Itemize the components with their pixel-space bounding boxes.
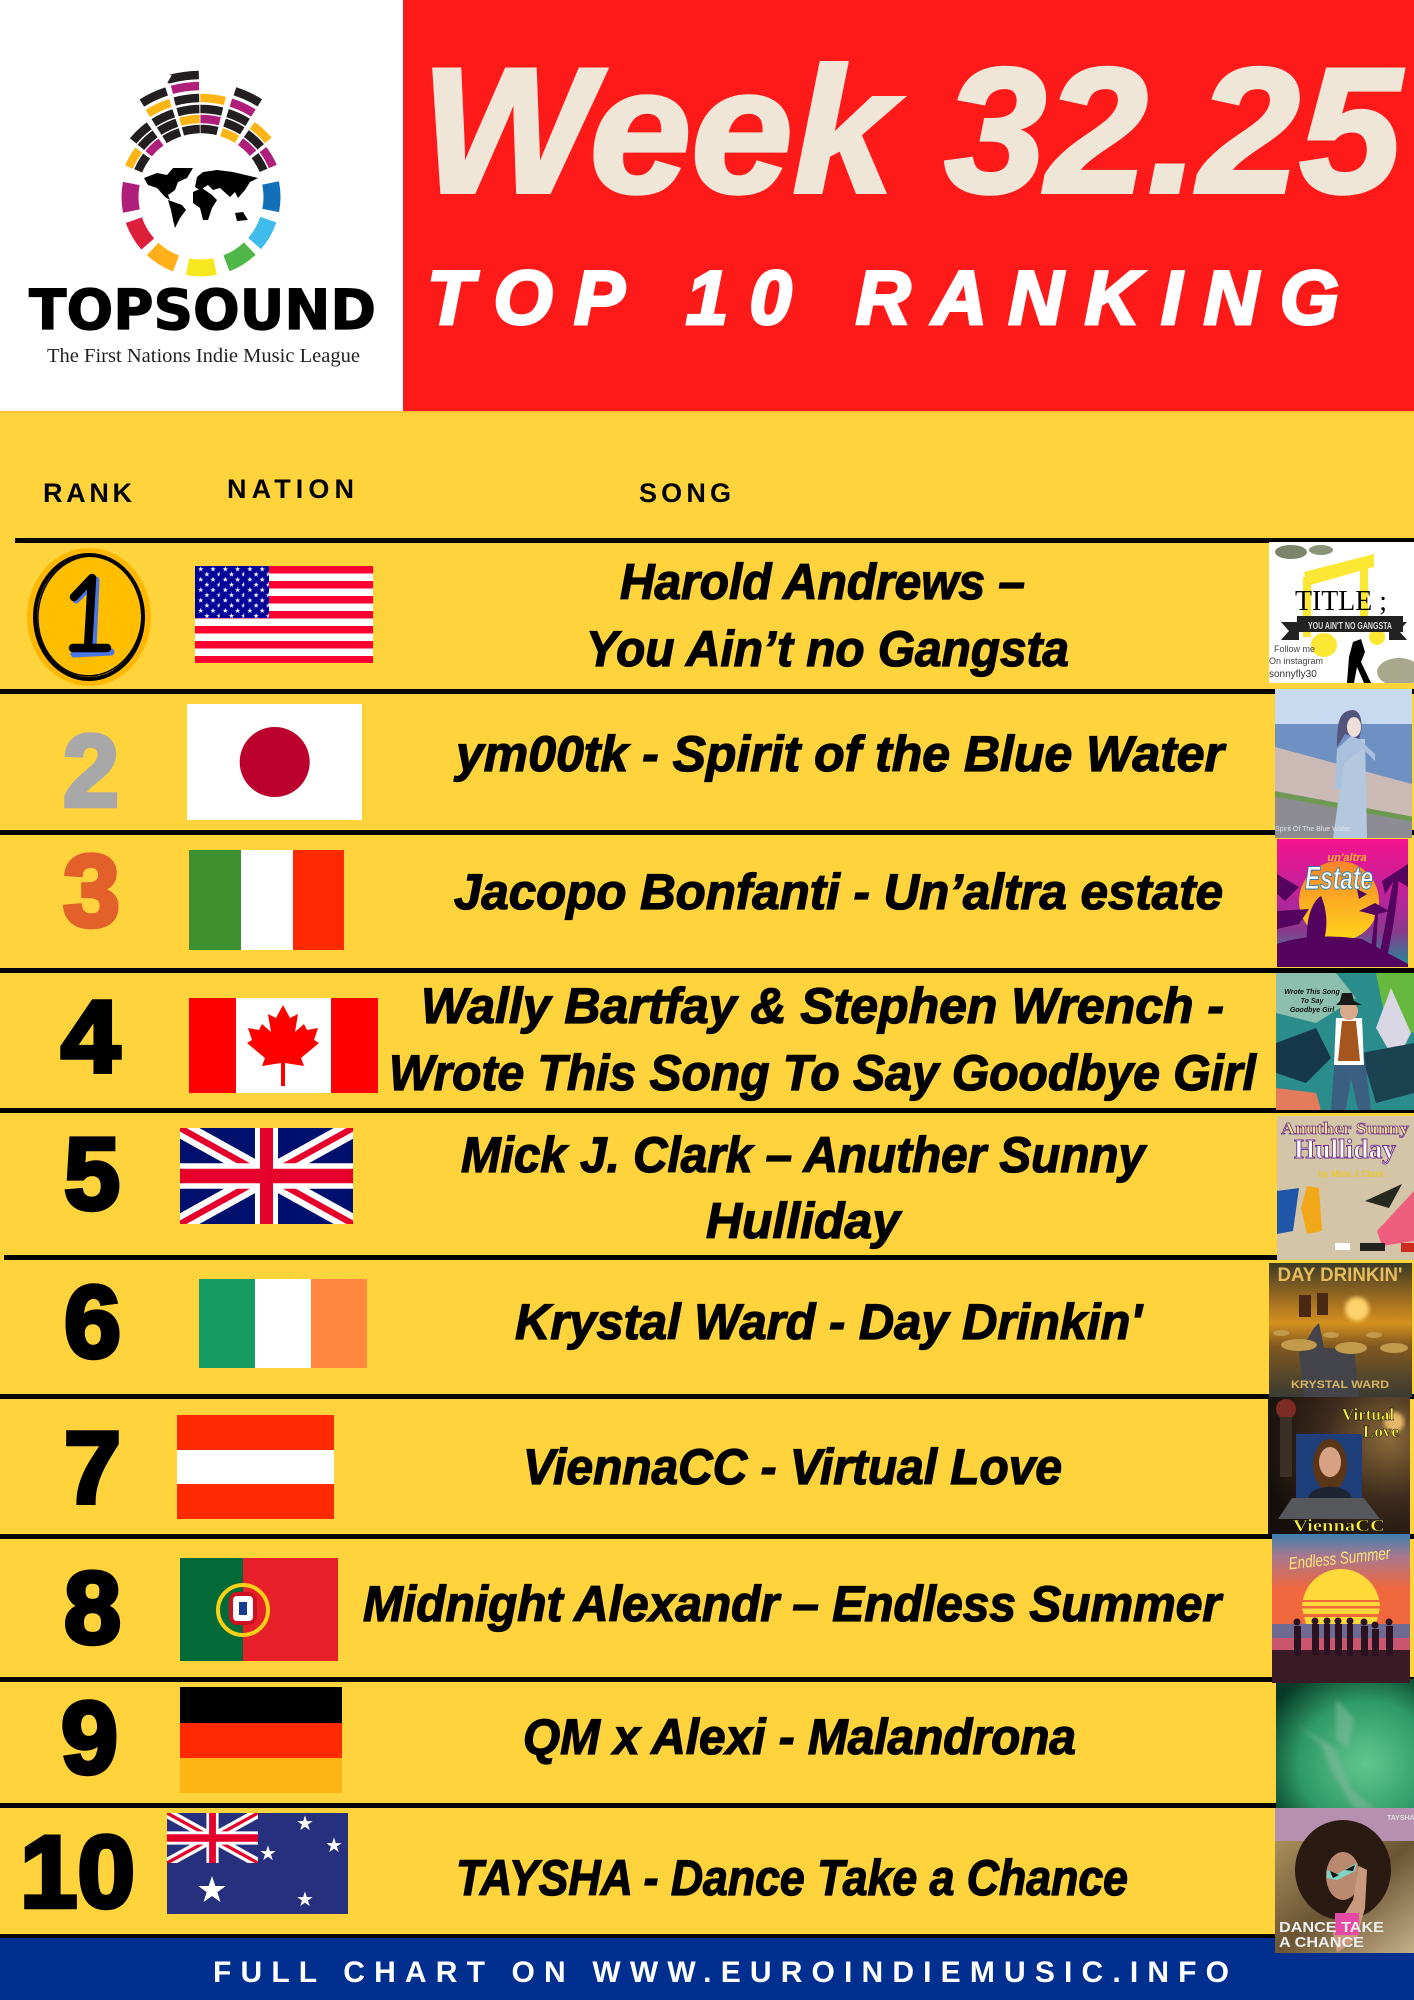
icon: colored ring segments <box>101 97 301 297</box>
rank numbers: 4 <box>61 980 120 1094</box>
column headings <box>43 474 731 508</box>
album art 2: Spirit of the Blue Water: Spirit Of The Blue Water <box>1275 826 1351 833</box>
flag: USA <box>195 566 373 663</box>
song titles: Jacopo Bonfanti - Un’altra estate <box>454 864 1223 920</box>
album art 6: Day Drinkin': DAY DRINKIN' <box>1278 1265 1402 1286</box>
column headings: SONG <box>639 478 731 508</box>
song titles: Midnight Alexandr – Endless Summer <box>363 1576 1223 1632</box>
flag: Australia: ★ <box>296 1811 314 1835</box>
album art 7: Virtual Love: Virtual <box>1342 1405 1394 1424</box>
album art 7: Virtual Love <box>1268 1397 1410 1535</box>
flag: Japan <box>187 704 362 820</box>
album art 1: You Ain't no Gangsta: TITLE ; <box>1295 585 1387 617</box>
rank numbers: 10 <box>20 1815 135 1929</box>
song titles: ViennaCC - Virtual Love <box>523 1439 1062 1495</box>
album art 3: Un'altra estate <box>1277 839 1408 967</box>
logo wordmark: TOPSOUND <box>29 278 376 342</box>
album art 10: Dance Take a Chance: DANCE TAKE <box>1279 1919 1384 1936</box>
flag: Australia: ★ <box>196 1870 228 1911</box>
rank numbers: 8 <box>64 1551 121 1665</box>
album art 10: Dance Take a Chance <box>1275 1808 1414 1953</box>
panel: title banner <box>403 0 1414 411</box>
album art 7: Virtual Love: ViennaCC <box>1293 1516 1385 1535</box>
panel: logo <box>0 0 403 411</box>
thin edge under header <box>0 411 1414 413</box>
album art 9: Malandrona <box>1276 1679 1414 1808</box>
album art 4: Wrote This Song: Wrote This Song <box>1284 989 1340 996</box>
rank numbers: 2 <box>63 714 119 828</box>
song titles: TAYSHA - Dance Take a Chance <box>456 1850 1128 1906</box>
album art 1: You Ain't no Gangsta <box>1269 542 1414 683</box>
album art 4: Wrote This Song: To Say <box>1301 998 1324 1005</box>
title: Week 32.25 <box>421 31 1404 230</box>
album art 10: Dance Take a Chance: TAYSHA <box>1387 1815 1414 1822</box>
song titles: Mick J. Clark – Anuther Sunny <box>461 1127 1147 1183</box>
flag: Australia: ★ <box>325 1833 343 1857</box>
album art 5: Anuther Sunny Hulliday: by Mick J Clark <box>1318 1169 1385 1179</box>
rank 1 badge <box>27 548 151 686</box>
album art 7: Virtual Love: Love <box>1363 1422 1399 1441</box>
album art 10: Dance Take a Chance: A CHANCE <box>1279 1934 1364 1951</box>
flag: Australia <box>167 1811 348 1914</box>
song titles: Hulliday <box>706 1193 902 1249</box>
rank numbers: 7 <box>64 1411 121 1525</box>
album art 3: Un'altra estate: un'altra <box>1327 852 1367 864</box>
song titles: Krystal Ward - Day Drinkin' <box>515 1294 1144 1350</box>
album art 5: Anuther Sunny Hulliday: Anuther Sunny <box>1281 1119 1410 1138</box>
flag: Austria <box>177 1415 334 1519</box>
album art 5: Anuther Sunny Hulliday: Hulliday <box>1294 1134 1396 1164</box>
subtitle: TOP 10 RANKING <box>427 256 1339 341</box>
song titles <box>363 554 1257 1906</box>
footer bar <box>0 1938 1414 2000</box>
album art 3: Un'altra estate: Estate <box>1305 860 1373 896</box>
flag: Portugal <box>180 1558 338 1661</box>
album art 4: Wrote This Song <box>1276 973 1414 1110</box>
song titles: You Ain’t no Gangsta <box>586 621 1069 677</box>
rank numbers: 6 <box>64 1265 121 1379</box>
album art 4: Wrote This Song: Goodbye Girl <box>1290 1007 1335 1014</box>
song titles: ym00tk - Spirit of the Blue Water <box>453 726 1227 782</box>
flag: Germany <box>180 1687 342 1793</box>
album art 1: You Ain't no Gangsta: Follow me <box>1274 644 1315 654</box>
icon: topsound equalizer arcs <box>48 44 354 350</box>
album art 6: Day Drinkin': KRYSTAL WARD <box>1291 1379 1389 1391</box>
song titles: Harold Andrews – <box>620 554 1025 610</box>
album art 1: You Ain't no Gangsta: On instagram <box>1269 656 1323 666</box>
flag: United Kingdom <box>180 1128 353 1224</box>
column headings: RANK <box>43 478 132 508</box>
song titles: Wally Bartfay & Stephen Wrench - <box>421 978 1224 1034</box>
flag: Australia: ★ <box>296 1887 314 1911</box>
album art 1: You Ain't no Gangsta: sonnyfly30 <box>1269 669 1317 680</box>
row dividers <box>0 538 1414 1939</box>
flag: Italy <box>189 850 344 950</box>
album art 8: Endless Summer <box>1272 1534 1410 1683</box>
album art 6: Day Drinkin' <box>1269 1263 1412 1397</box>
album art 5: Anuther Sunny Hulliday <box>1277 1116 1414 1260</box>
flag: Australia: ★ <box>259 1841 277 1865</box>
flag: Ireland <box>199 1279 367 1368</box>
logo tagline: The First Nations Indie Music League <box>47 345 360 367</box>
song titles: QM x Alexi - Malandrona <box>523 1709 1076 1765</box>
song titles: Wrote This Song To Say Goodbye Girl <box>389 1045 1257 1101</box>
rank numbers: 3 <box>63 834 120 948</box>
flag: Canada <box>189 998 378 1093</box>
icon: world map <box>144 168 258 228</box>
column headings: NATION <box>227 474 354 504</box>
rank numbers: 9 <box>61 1681 118 1795</box>
rank numbers: 5 <box>64 1117 120 1231</box>
rank numbers <box>20 714 135 1929</box>
footer text: FULL CHART ON WWW.EUROINDIEMUSIC.INFO <box>213 1956 1229 1989</box>
album art 2: Spirit of the Blue Water <box>1275 689 1412 838</box>
